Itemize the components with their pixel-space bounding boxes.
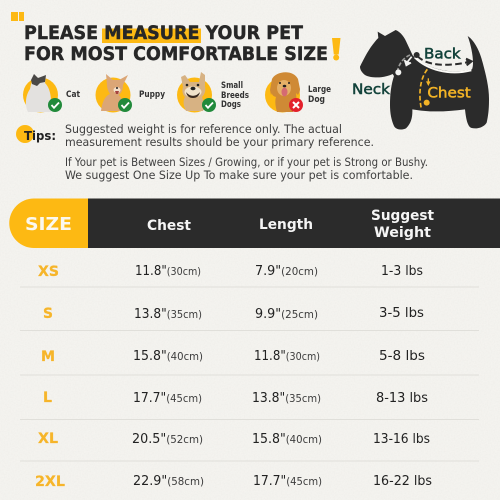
- label: chest: Chest: [427, 85, 471, 101]
- label: large dog: Large: [308, 85, 331, 95]
- label: small breeds dogs: [221, 81, 249, 110]
- row: M: 15.8"(40cm): [133, 349, 203, 364]
- dog measurement diagram: [352, 30, 489, 130]
- label: small breeds dogs: Small: [221, 81, 243, 91]
- pet: cat: [23, 74, 81, 112]
- pet: puppy: [96, 74, 165, 112]
- table header: Length: [259, 217, 313, 233]
- row: XL: [38, 431, 430, 447]
- row: 2XL: 16-22 lbs: [373, 474, 432, 489]
- label: cat: Cat: [66, 90, 81, 100]
- table header: [9, 198, 500, 248]
- row: M: [41, 349, 425, 365]
- row: XS: XS: [38, 264, 59, 280]
- dog silhouette: [360, 30, 489, 130]
- row: L: L: [43, 390, 52, 406]
- row: XS: 1-3 lbs: [381, 264, 423, 279]
- tips text: measurement results should be your primary reference.: [65, 135, 374, 149]
- row: L: 8-13 lbs: [376, 391, 428, 406]
- row: XS: 7.9"(20cm): [255, 264, 318, 279]
- pet: small breed dog: [177, 72, 249, 112]
- row: L: [43, 390, 428, 406]
- row: 2XL: [35, 474, 432, 490]
- tips text: [65, 122, 428, 182]
- label: small breeds dogs: Dogs: [221, 100, 241, 110]
- table header: SIZE: [25, 214, 72, 235]
- row: XL: 20.5"(52cm): [132, 432, 203, 447]
- pet: large dog: [265, 72, 331, 112]
- title: PLEASE MEASURE YOUR PET: [24, 23, 303, 44]
- row: S: 13.8"(35cm): [134, 307, 202, 322]
- quote mark: [11, 12, 24, 21]
- table header: Suggest: [371, 208, 434, 224]
- row: XL: 15.8"(40cm): [252, 432, 322, 447]
- chest arrow: [420, 69, 431, 109]
- row: L: 17.7"(45cm): [133, 391, 202, 406]
- row: 2XL: 17.7"(45cm): [253, 474, 322, 489]
- back arrow: [414, 52, 472, 65]
- row: XS: 11.8"(30cm): [135, 264, 201, 279]
- tips text: We suggest One Size Up To make sure your pet is comfortable.: [65, 168, 413, 182]
- tips text: If Your pet is Between Sizes / Growing, or if your pet is Strong or Bushy.: [65, 155, 428, 169]
- tips icon: Tips:: [24, 128, 56, 143]
- tips text: Suggested weight is for reference only. The actual: [65, 122, 342, 136]
- title: FOR MOST COMFORTABLE SIZE: [24, 44, 328, 65]
- label: back: Back: [424, 46, 462, 62]
- label: puppy: Puppy: [139, 90, 165, 100]
- row: S: 9.9"(25cm): [255, 307, 318, 322]
- label: large dog: Dog: [308, 95, 325, 105]
- row: S: S: [43, 306, 53, 322]
- row: XS: [38, 264, 423, 280]
- row: S: [43, 306, 424, 322]
- table header: Weight: [374, 225, 431, 241]
- row: M: 5-8 lbs: [379, 349, 425, 364]
- title: [24, 23, 328, 65]
- row: 2XL: 2XL: [35, 474, 65, 490]
- row: M: 11.8"(30cm): [254, 349, 320, 364]
- row: 2XL: 22.9"(58cm): [133, 474, 204, 489]
- row: L: 13.8"(35cm): [252, 391, 321, 406]
- neck arrow: [395, 55, 412, 75]
- row: M: M: [41, 349, 55, 365]
- label: large dog: [308, 85, 331, 105]
- exclamation mark: [332, 38, 340, 60]
- row dividers: [20, 287, 479, 461]
- label: small breeds dogs: Breeds: [221, 91, 249, 101]
- row: XL: XL: [38, 431, 58, 447]
- row: S: 3-5 lbs: [379, 306, 424, 321]
- table header: Chest: [147, 218, 191, 234]
- tips icon: [16, 125, 56, 143]
- label: neck: Neck: [352, 82, 391, 98]
- row: XL: 13-16 lbs: [373, 432, 430, 447]
